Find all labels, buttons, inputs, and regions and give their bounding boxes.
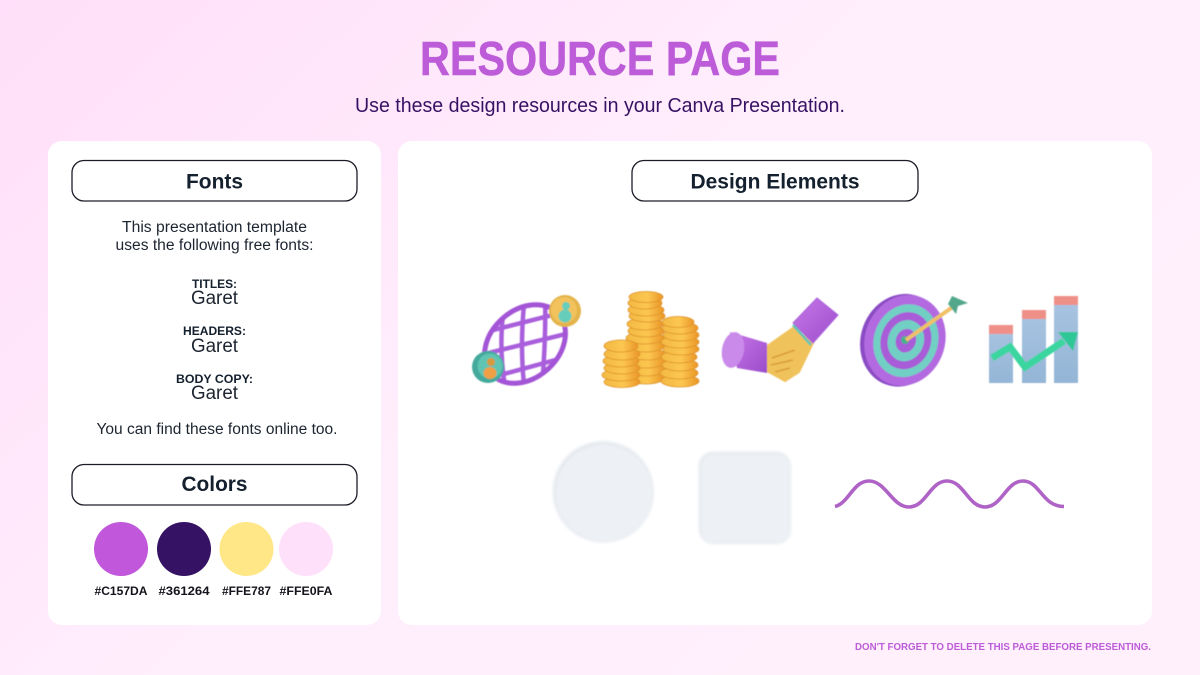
text block: titles font bbox=[191, 277, 239, 309]
text block: headers font bbox=[183, 324, 246, 357]
neumorphic circle bbox=[553, 442, 653, 542]
text block: font intro: uses the following free fonts: bbox=[116, 237, 314, 254]
icon: bar chart with arrow bbox=[989, 296, 1078, 383]
icon: target with arrow bbox=[847, 282, 968, 399]
text block: titles font: TITLES: bbox=[192, 277, 237, 291]
color labels: #C157DA bbox=[94, 584, 148, 598]
neumorphic square bbox=[699, 452, 790, 544]
color labels: #361264 bbox=[158, 584, 210, 598]
color labels: #FFE787 bbox=[222, 584, 271, 598]
panel: fonts and colors bbox=[48, 141, 381, 625]
heading: design elements bbox=[632, 160, 918, 201]
heading: fonts: Fonts bbox=[186, 170, 243, 194]
icon: handshake bbox=[719, 298, 838, 381]
heading: fonts bbox=[72, 160, 357, 201]
icon: coin stacks bbox=[602, 292, 699, 388]
heading: design elements: Design Elements bbox=[690, 170, 860, 194]
color labels bbox=[94, 584, 333, 598]
subtitle: Use these design resources in your Canva Presentation. bbox=[355, 95, 845, 117]
heading: colors bbox=[72, 464, 357, 505]
title: RESOURCE PAGE bbox=[420, 33, 780, 86]
panel: design elements bbox=[398, 141, 1152, 625]
text block: body copy font bbox=[176, 372, 253, 404]
icon: globe with people bbox=[471, 294, 582, 386]
color swatches bbox=[94, 522, 333, 576]
footer note: DON'T FORGET TO DELETE THIS PAGE BEFORE PRESENTING. bbox=[855, 642, 1151, 653]
text block: headers font: Garet bbox=[191, 336, 239, 357]
text block: headers font: HEADERS: bbox=[183, 324, 246, 338]
text block: font intro bbox=[116, 219, 314, 254]
color labels: #FFE0FA bbox=[280, 584, 333, 598]
text block: body copy font: BODY COPY: bbox=[176, 372, 253, 386]
text block: body copy font: Garet bbox=[191, 383, 239, 404]
text block: titles font: Garet bbox=[191, 288, 239, 309]
wavy line bbox=[835, 481, 1064, 507]
text block: font note: You can find these fonts online too. bbox=[96, 421, 338, 438]
text block: font intro: This presentation template bbox=[122, 219, 307, 236]
heading: colors: Colors bbox=[182, 473, 248, 496]
